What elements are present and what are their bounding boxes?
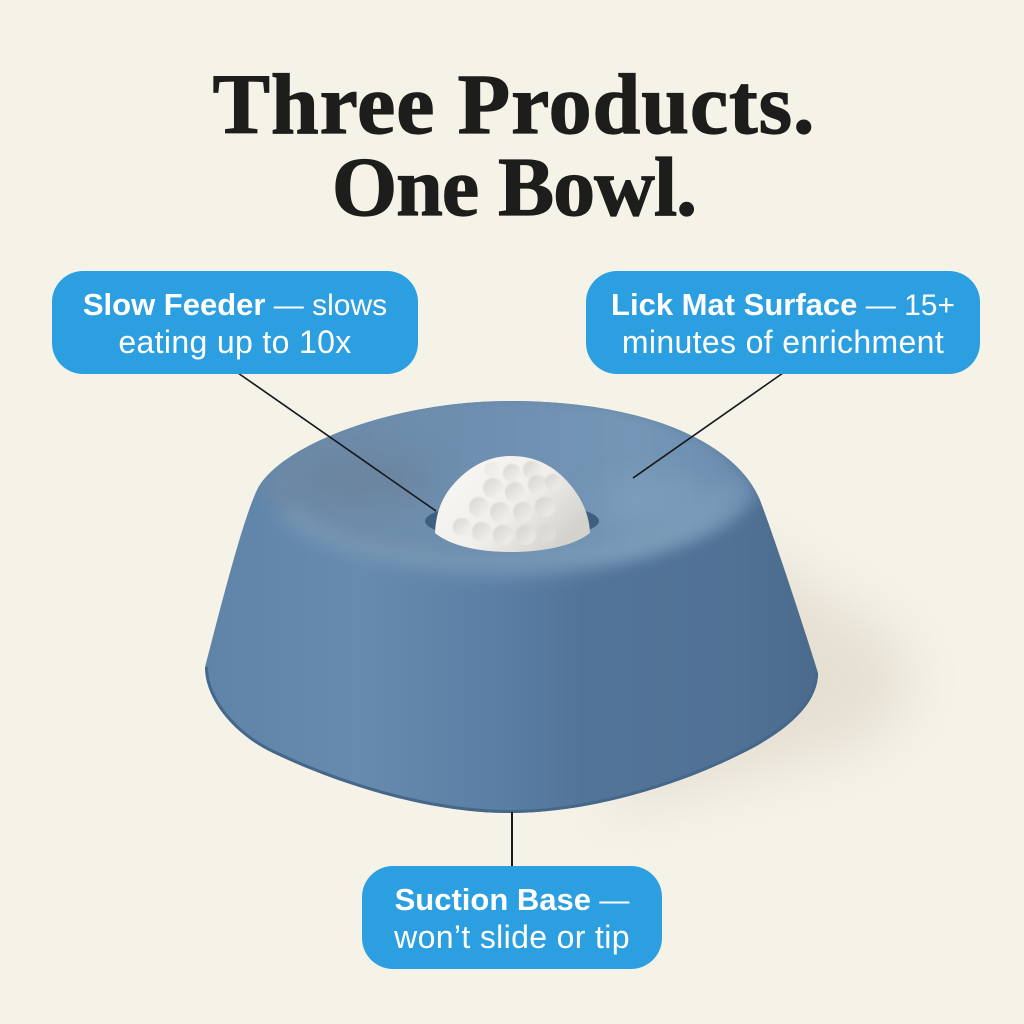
leader: slow feeder — [238, 373, 436, 511]
top dish surface — [262, 395, 758, 570]
title: One Bowl. — [332, 141, 696, 234]
dish shadow — [323, 458, 418, 498]
right dish glow — [660, 491, 694, 509]
title — [213, 56, 815, 234]
leader: suction base — [511, 812, 513, 866]
callout: slow feeder: eating up to 10x — [118, 324, 352, 360]
callout: lick mat surface: minutes of enrichment — [622, 324, 944, 360]
bowl body — [190, 390, 830, 820]
callout: slow feeder: Slow Feeder — slows — [83, 287, 387, 322]
callout: lick mat surface: Lick Mat Surface — 15+ — [611, 287, 955, 322]
callout: lick mat surface — [586, 271, 980, 374]
bowl illustration — [205, 374, 910, 866]
title: Three Products. — [213, 56, 815, 152]
leader: lick mat — [633, 373, 783, 478]
cast shadow — [600, 540, 908, 815]
feeder hole — [425, 502, 599, 540]
callout: suction base: won’t slide or tip — [394, 919, 630, 955]
base lip shading — [205, 667, 818, 813]
rim highlight — [292, 520, 634, 579]
callout: suction base — [362, 866, 662, 969]
callout: suction base: Suction Base — — [395, 882, 629, 917]
callout: slow feeder — [52, 271, 418, 374]
golf ball — [435, 456, 590, 552]
